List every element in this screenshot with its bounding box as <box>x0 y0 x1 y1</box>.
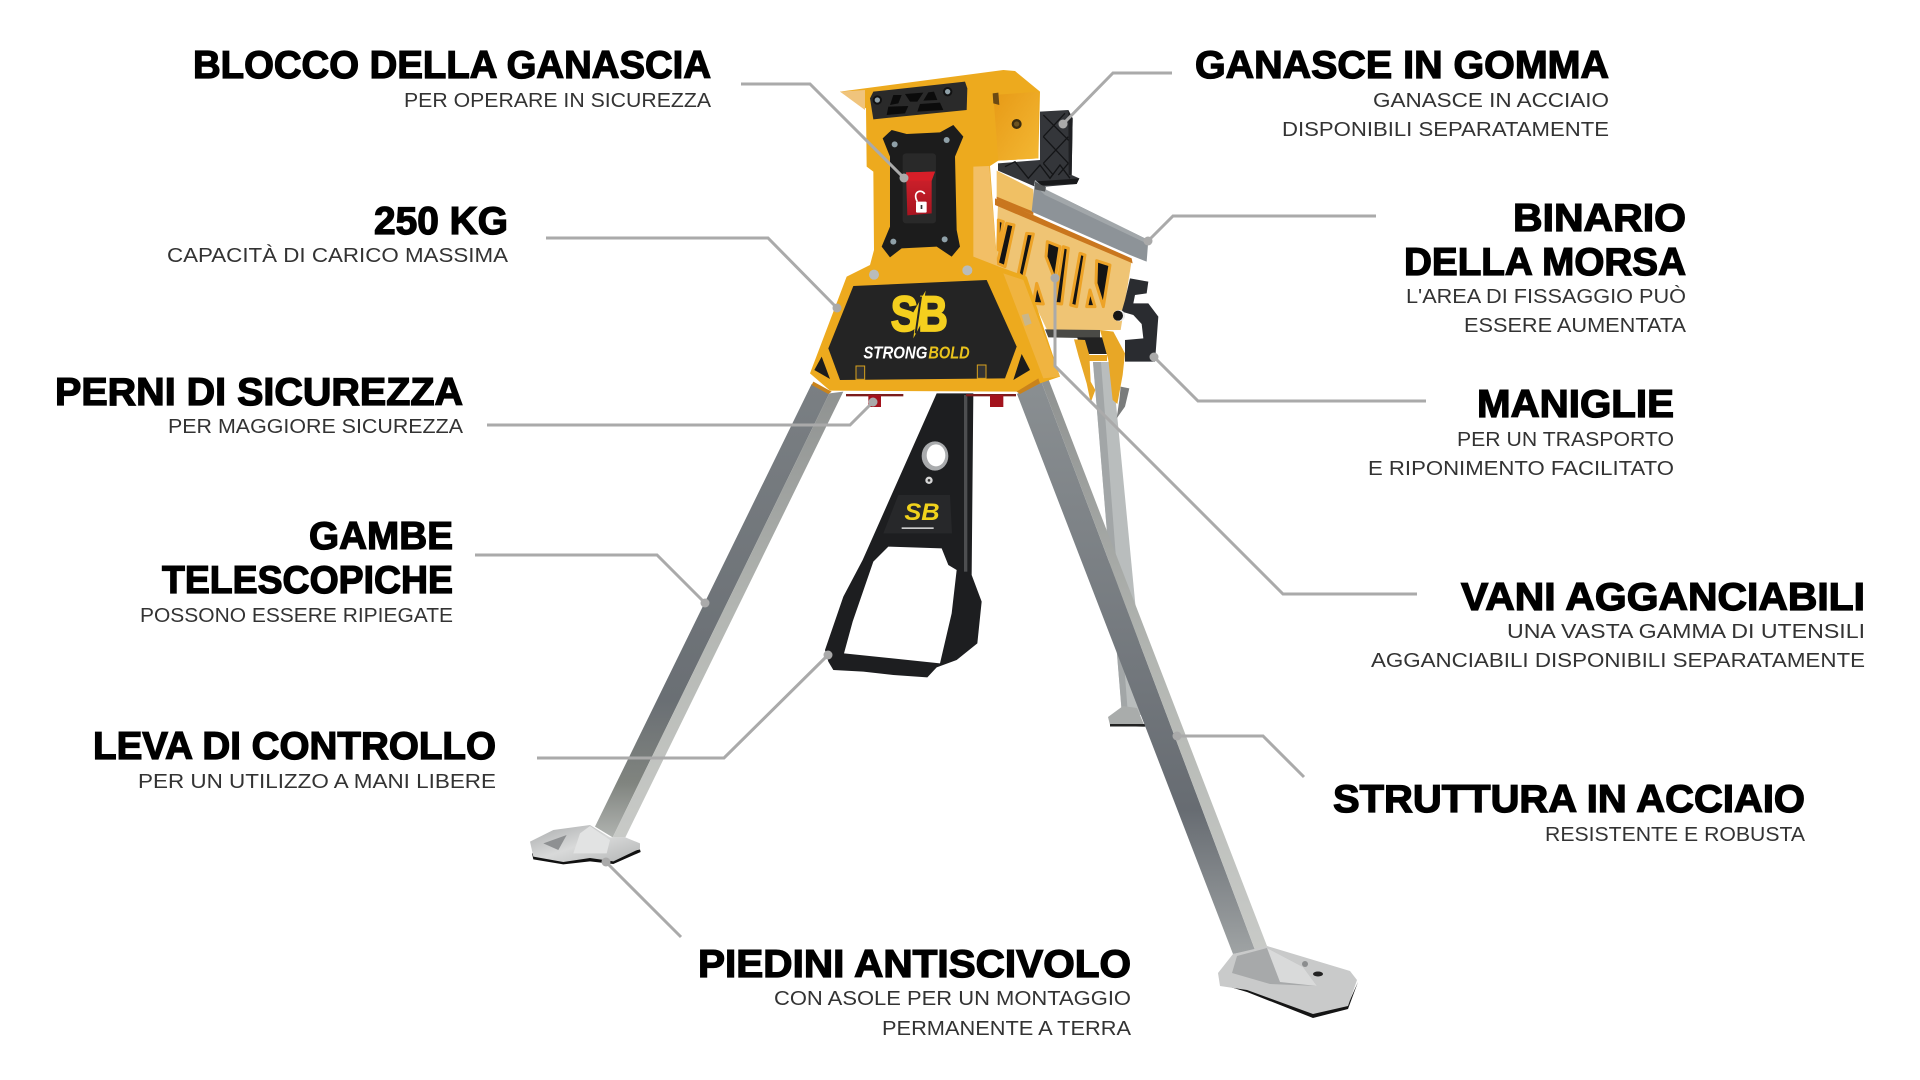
heading line one: BINARIO <box>1513 197 1686 240</box>
logo wordmark: STRONG <box>863 342 927 362</box>
back leg and foot <box>1093 362 1146 727</box>
leader line <box>537 650 832 758</box>
heading line two: DELLA MORSA <box>1404 241 1686 284</box>
callout: struttura in acciaio <box>1172 732 1806 846</box>
heading: BLOCCO DELLA GANASCIA <box>193 44 711 87</box>
leader line <box>1058 73 1172 128</box>
description: PER OPERARE IN SICUREZZA <box>404 90 712 112</box>
logo panel <box>814 280 1030 380</box>
latch <box>1117 387 1129 418</box>
heading: PERNI DI SICUREZZA <box>55 371 463 414</box>
callout: piedini antiscivolo <box>602 858 1132 1040</box>
description line one: L'AREA DI FISSAGGIO PUÒ <box>1406 285 1686 308</box>
beam with hook slots <box>995 198 1133 331</box>
callout: blocco della ganascia <box>193 44 908 182</box>
channel interior <box>993 92 1038 161</box>
side bolt <box>1022 313 1032 326</box>
clamp bar <box>1045 329 1100 338</box>
description line one: GANASCE IN ACCIAIO <box>1373 90 1609 112</box>
heading line one: GAMBE <box>309 515 453 558</box>
heading: PIEDINI ANTISCIVOLO <box>698 943 1131 986</box>
description: CAPACITÀ DI CARICO MASSIMA <box>167 244 509 267</box>
description: PER UN UTILIZZO A MANI LIBERE <box>138 771 496 793</box>
description line two: PERMANENTE A TERRA <box>882 1018 1132 1040</box>
heading: LEVA DI CONTROLLO <box>93 725 496 768</box>
description line one: CON ASOLE PER UN MONTAGGIO <box>774 988 1131 1010</box>
description line one: UNA VASTA GAMMA DI UTENSILI <box>1507 621 1865 643</box>
callout: ganasce in gomma <box>1058 44 1609 141</box>
rod <box>1077 337 1110 354</box>
leader line <box>1150 352 1426 401</box>
leader line <box>741 84 908 182</box>
head body <box>810 70 1060 392</box>
flange tip <box>840 90 865 110</box>
lever logo badge: SB <box>904 499 940 526</box>
callout: maniglie <box>1150 352 1674 480</box>
logo wordmark: BOLD <box>928 342 970 362</box>
heading: STRUTTURA IN ACCIAIO <box>1333 778 1805 821</box>
callout: perni di sicurezza <box>55 371 878 438</box>
description line two: AGGANCIABILI DISPONIBILI SEPARATAMENTE <box>1371 650 1865 672</box>
lever hole <box>922 441 948 484</box>
front left leg and foot <box>530 384 843 864</box>
heading: MANIGLIE <box>1477 383 1674 426</box>
description line two: E RIPONIMENTO FACILITATO <box>1368 458 1674 480</box>
callout: binario della morsa <box>1144 197 1687 337</box>
leader line <box>1172 732 1304 777</box>
front right leg and foot <box>1017 378 1358 1018</box>
upper beam block and grey rail <box>997 171 1148 262</box>
side strip <box>1003 273 1060 378</box>
rubber jaw <box>998 110 1079 187</box>
leader line <box>487 398 878 425</box>
heading: GANASCE IN GOMMA <box>1195 44 1609 87</box>
foot right <box>1218 946 1358 1018</box>
red lock lever <box>906 172 935 215</box>
leader line <box>1050 274 1417 594</box>
heading line two: TELESCOPICHE <box>162 559 453 602</box>
light column stripe <box>973 166 997 266</box>
callout: gambe telescopiche <box>140 515 710 627</box>
lever logo badge <box>883 495 952 533</box>
knob <box>1113 310 1125 321</box>
description: POSSONO ESSERE RIPIEGATE <box>140 605 453 627</box>
description line two: DISPONIBILI SEPARATAMENTE <box>1282 119 1609 141</box>
callout: leva di controllo <box>93 650 832 793</box>
description line one: PER UN TRASPORTO <box>1457 429 1674 451</box>
leader line <box>602 858 681 937</box>
clamp head in detail coordinates <box>810 70 1060 407</box>
logo SB: SB <box>891 286 948 342</box>
leader line <box>546 238 842 312</box>
heading: VANI AGGANCIABILI <box>1461 576 1865 619</box>
leader line <box>475 555 710 608</box>
yellow brackets <box>1074 330 1125 404</box>
callout: vani agganciabili <box>1050 274 1865 672</box>
foot left <box>530 825 641 864</box>
product: workbench clamp <box>530 70 1358 1018</box>
leg collars <box>812 378 1040 394</box>
underside brackets and handle <box>1045 278 1158 418</box>
description: PER MAGGIORE SICUREZZA <box>168 416 464 438</box>
description: RESISTENTE E ROBUSTA <box>1545 824 1806 846</box>
heading: 250 KG <box>374 200 508 243</box>
top rubber block <box>870 82 967 119</box>
leader line <box>1144 216 1376 246</box>
control lever <box>825 393 982 677</box>
description line two: ESSERE AUMENTATA <box>1464 315 1687 337</box>
lock plate <box>882 125 963 257</box>
callout: 250 kg <box>167 200 842 312</box>
carry handle <box>1122 278 1158 362</box>
screws <box>869 265 972 280</box>
safety pins <box>846 394 1016 407</box>
